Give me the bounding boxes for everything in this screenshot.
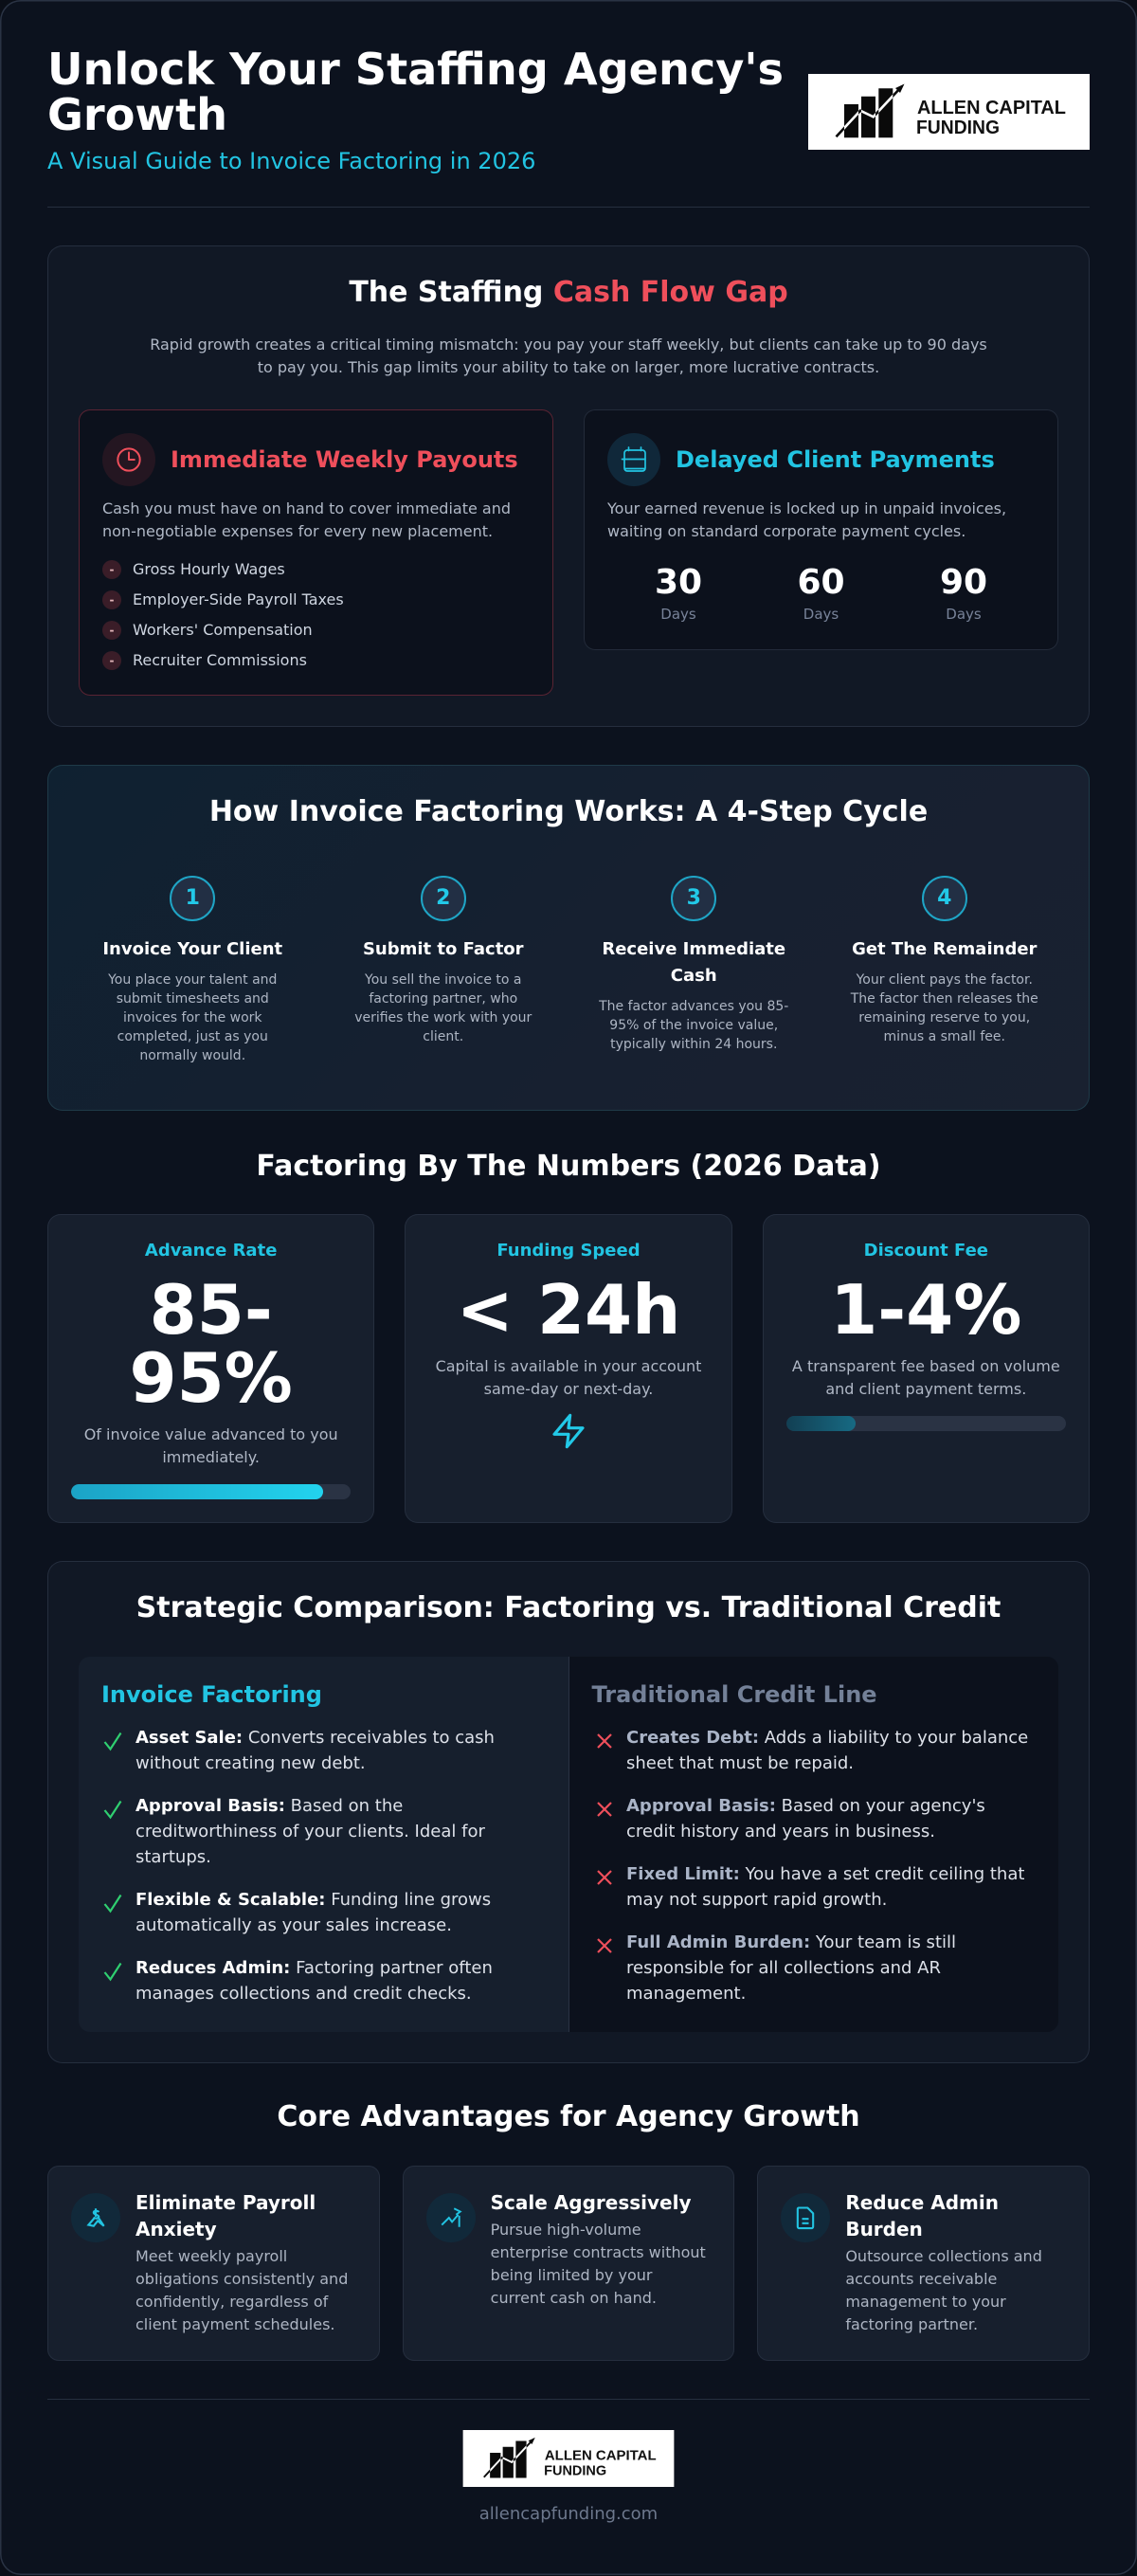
card text: enterprise contracts without bbox=[491, 2243, 706, 2261]
expense list: Workers' Compensation bbox=[133, 621, 313, 639]
stat card: advance rate: immediately. bbox=[162, 1448, 260, 1466]
progress bar: discount fee bbox=[786, 1416, 1066, 1431]
step 3 bbox=[599, 876, 788, 1052]
step 3: The factor advances you 85- bbox=[599, 999, 788, 1014]
card title: Anxiety bbox=[135, 2218, 217, 2240]
stat card: advance rate: Advance Rate bbox=[145, 1241, 277, 1261]
step 1: Invoice Your Client bbox=[102, 938, 282, 959]
item: flexible and scalable: automatically as your sales increase. bbox=[135, 1915, 452, 1935]
item: fixed limit: Fixed Limit: You have a set credit ceiling that bbox=[626, 1863, 1024, 1884]
column: traditional credit line bbox=[569, 1657, 1058, 2032]
intro text bbox=[150, 336, 987, 376]
card title bbox=[845, 2191, 999, 2240]
step 2: client. bbox=[423, 1029, 463, 1044]
item: asset sale: Asset Sale: Converts receivables to cash bbox=[135, 1727, 495, 1748]
stat card: funding speed: same-day or next-day. bbox=[484, 1380, 653, 1398]
title: Growth bbox=[47, 89, 227, 140]
footer url: allencapfunding.com bbox=[479, 2504, 658, 2524]
item: approval basis: Approval Basis: Based on your agency's bbox=[626, 1795, 985, 1816]
item: creates debt bbox=[597, 1727, 1028, 1772]
stat card: discount fee: 1-4% bbox=[830, 1270, 1021, 1350]
logo: Allen Capital Funding footer: ALLEN CAPITAL bbox=[545, 2448, 657, 2464]
expense list: Gross Hourly Wages bbox=[133, 560, 285, 578]
card text: Outsource collections and bbox=[845, 2247, 1042, 2265]
item: reduces admin: manages collections and credit checks. bbox=[135, 1984, 472, 2004]
step 3: Receive Immediate bbox=[602, 938, 785, 959]
card text: Your earned revenue is locked up in unpaid invoices, bbox=[607, 499, 1006, 517]
logo: Allen Capital Funding header: FUNDING bbox=[916, 118, 1000, 138]
card title: Scale Aggressively bbox=[491, 2191, 692, 2214]
step 4: The factor then releases the bbox=[851, 991, 1038, 1007]
item: full admin burden: Full Admin Burden: Your team is still bbox=[626, 1932, 956, 1952]
item: approval basis bbox=[597, 1795, 985, 1841]
card text: factoring partner. bbox=[845, 2315, 978, 2333]
card text: waiting on standard corporate payment cycles. bbox=[607, 522, 966, 540]
step 4: Get The Remainder bbox=[852, 938, 1037, 959]
icon: dollar bbox=[71, 2193, 120, 2242]
item: approval basis: creditworthiness of your clients. Ideal for bbox=[135, 1822, 485, 1841]
intro text: Rapid growth creates a critical timing mismatch: you pay your staff weekly, but clients can take up to 90 days bbox=[150, 336, 987, 353]
item: asset sale bbox=[104, 1727, 495, 1772]
stat: 30 days bbox=[655, 563, 702, 623]
stat card: discount fee: and client payment terms. bbox=[825, 1380, 1026, 1398]
stat: 30 days: 30 bbox=[655, 563, 702, 602]
item: approval basis: startups. bbox=[135, 1846, 211, 1867]
stat: 60 days: 60 bbox=[797, 563, 845, 602]
stat: 90 days bbox=[940, 563, 987, 623]
stat: 90 days: Days bbox=[946, 606, 982, 623]
step 4: 4 bbox=[937, 886, 951, 910]
expense list bbox=[102, 560, 344, 670]
item: approval basis: credit history and years in business. bbox=[626, 1822, 935, 1841]
panel: strategic comparison bbox=[47, 1561, 1090, 2062]
title: Unlock Your Staffing Agency's bbox=[47, 44, 784, 95]
advantage card: reduce admin burden bbox=[757, 2166, 1090, 2361]
card title: Immediate Weekly Payouts bbox=[171, 446, 518, 473]
step 1: invoices for the work bbox=[123, 1010, 262, 1025]
stat: 90 days: 90 bbox=[940, 563, 987, 602]
item: fixed limit: may not support rapid growth. bbox=[626, 1890, 887, 1909]
step 2: 2 bbox=[436, 886, 450, 910]
stat card: discount fee: Discount Fee bbox=[864, 1241, 988, 1261]
icon: document bbox=[781, 2193, 830, 2242]
stat card: advance rate bbox=[47, 1214, 374, 1523]
card: immediate weekly payouts bbox=[79, 409, 553, 696]
item: approval basis bbox=[104, 1795, 485, 1867]
panel: the staffing cash flow gap bbox=[47, 245, 1090, 727]
item: fixed limit bbox=[597, 1863, 1024, 1909]
step 3: typically within 24 hours. bbox=[610, 1037, 777, 1052]
icon: growth chart bbox=[426, 2193, 476, 2242]
expense list: - bbox=[110, 654, 114, 667]
stat card: advance rate: Of invoice value advanced to you bbox=[84, 1425, 338, 1443]
card text: current cash on hand. bbox=[491, 2289, 657, 2307]
step 2 bbox=[354, 876, 532, 1044]
heading: factoring by the numbers: Factoring By The Numbers (2026 Data) bbox=[256, 1150, 881, 1183]
card text: Meet weekly payroll bbox=[135, 2247, 287, 2265]
item: full admin burden bbox=[597, 1932, 956, 2004]
step 2: You sell the invoice to a bbox=[365, 972, 521, 988]
logo: Allen Capital Funding header: ALLEN CAPITAL bbox=[917, 98, 1066, 118]
step 1 bbox=[102, 876, 282, 1063]
card text: accounts receivable bbox=[845, 2270, 997, 2288]
item: creates debt: sheet that must be repaid. bbox=[626, 1753, 854, 1772]
card text bbox=[135, 2247, 348, 2333]
expense list: Recruiter Commissions bbox=[133, 651, 307, 669]
column heading: Traditional Credit Line bbox=[591, 1681, 877, 1708]
stat card: advance rate: 85- bbox=[150, 1270, 273, 1350]
step 3: 3 bbox=[687, 886, 701, 910]
card text bbox=[845, 2247, 1042, 2333]
heading: comparison: Strategic Comparison: Factoring vs. Traditional Credit bbox=[136, 1591, 1001, 1624]
card text bbox=[102, 499, 511, 540]
item: reduces admin bbox=[104, 1958, 493, 2004]
item: flexible and scalable: Flexible & Scalable: Funding line grows bbox=[135, 1890, 491, 1910]
progress bar: advance rate bbox=[71, 1484, 351, 1499]
card text: obligations consistently and bbox=[135, 2270, 348, 2288]
card: delayed client payments bbox=[584, 409, 1058, 650]
stat card: funding speed: < 24h bbox=[457, 1270, 680, 1350]
step 2: Submit to Factor bbox=[363, 938, 524, 959]
step 2: factoring partner, who bbox=[369, 991, 517, 1007]
card title bbox=[135, 2191, 316, 2240]
logo: Allen Capital Funding header bbox=[808, 74, 1090, 150]
advantage card: eliminate payroll anxiety bbox=[47, 2166, 380, 2361]
step 4 bbox=[851, 876, 1038, 1044]
card text: confidently, regardless of bbox=[135, 2293, 328, 2311]
stat card: funding speed bbox=[405, 1214, 732, 1523]
intro text: to pay you. This gap limits your ability to take on larger, more lucrative contracts. bbox=[258, 358, 879, 376]
item: reduces admin: Reduces Admin: Factoring partner often bbox=[135, 1958, 493, 1978]
step 2: verifies the work with your bbox=[354, 1010, 532, 1025]
panel: how invoice factoring works bbox=[47, 765, 1090, 1111]
title bbox=[47, 44, 784, 140]
card text bbox=[491, 2221, 706, 2307]
stat: 30 days: Days bbox=[660, 606, 696, 623]
step 3: 95% of the invoice value, bbox=[609, 1018, 778, 1033]
card text: Pursue high-volume bbox=[491, 2221, 641, 2239]
item: flexible and scalable bbox=[104, 1890, 491, 1935]
stat: 60 days bbox=[797, 563, 845, 623]
stat: 60 days: Days bbox=[803, 606, 839, 623]
step 1: normally would. bbox=[139, 1048, 245, 1063]
stat card: discount fee: A transparent fee based on volume bbox=[792, 1357, 1060, 1375]
advantage card: scale aggressively bbox=[403, 2166, 734, 2361]
step 1: completed, just as you bbox=[117, 1029, 268, 1044]
step 4: remaining reserve to you, bbox=[858, 1010, 1030, 1025]
card title: Reduce Admin bbox=[845, 2191, 999, 2214]
stat card: advance rate: 95% bbox=[129, 1338, 293, 1418]
card text: non-negotiable expenses for every new placement. bbox=[102, 522, 493, 540]
icon: clock bbox=[102, 433, 155, 486]
heading: core advantages: Core Advantages for Agency Growth bbox=[277, 2100, 860, 2133]
stat card: funding speed: Funding Speed bbox=[496, 1241, 641, 1261]
card text: being limited by your bbox=[491, 2266, 652, 2284]
logo: Allen Capital Funding footer bbox=[462, 2430, 675, 2487]
item: asset sale: without creating new debt. bbox=[135, 1753, 366, 1772]
stat card: funding speed: Capital is available in your account bbox=[436, 1357, 701, 1375]
item: full admin burden: management. bbox=[626, 1983, 746, 2004]
step 1: submit timesheets and bbox=[117, 991, 269, 1007]
column: invoice factoring bbox=[79, 1657, 569, 2032]
expense list: - bbox=[110, 593, 114, 607]
card text: client payment schedules. bbox=[135, 2315, 335, 2333]
step 3: Cash bbox=[671, 965, 717, 986]
heading: 4-step cycle: How Invoice Factoring Works: A 4-Step Cycle bbox=[209, 795, 928, 828]
icon: calendar bbox=[607, 433, 660, 486]
step 4: Your client pays the factor. bbox=[857, 972, 1033, 988]
logo: Allen Capital Funding footer: FUNDING bbox=[544, 2462, 606, 2478]
card title: Eliminate Payroll bbox=[135, 2191, 316, 2214]
card title: Burden bbox=[845, 2218, 923, 2240]
item: approval basis: Approval Basis: Based on the bbox=[135, 1795, 403, 1816]
subtitle: A Visual Guide to Invoice Factoring in 2026 bbox=[47, 148, 535, 174]
heading: cash flow gap: The Staffing Cash Flow Gap bbox=[349, 276, 788, 309]
expense list: Employer-Side Payroll Taxes bbox=[133, 590, 344, 608]
card text: management to your bbox=[845, 2293, 1006, 2311]
step 1: You place your talent and bbox=[108, 972, 277, 988]
column heading: Invoice Factoring bbox=[101, 1681, 322, 1708]
card text bbox=[607, 499, 1006, 540]
item: full admin burden: responsible for all collections and AR bbox=[626, 1958, 941, 1977]
step 1: 1 bbox=[186, 886, 200, 910]
expense list: - bbox=[110, 624, 114, 637]
expense list: - bbox=[110, 563, 114, 576]
icon: lightning bolt bbox=[552, 1414, 585, 1448]
card title: Delayed Client Payments bbox=[676, 446, 995, 473]
card text: Cash you must have on hand to cover immediate and bbox=[102, 499, 511, 517]
step 4: minus a small fee. bbox=[884, 1029, 1005, 1044]
stat card: discount fee bbox=[763, 1214, 1090, 1523]
item: creates debt: Creates Debt: Adds a liability to your balance bbox=[626, 1727, 1028, 1748]
